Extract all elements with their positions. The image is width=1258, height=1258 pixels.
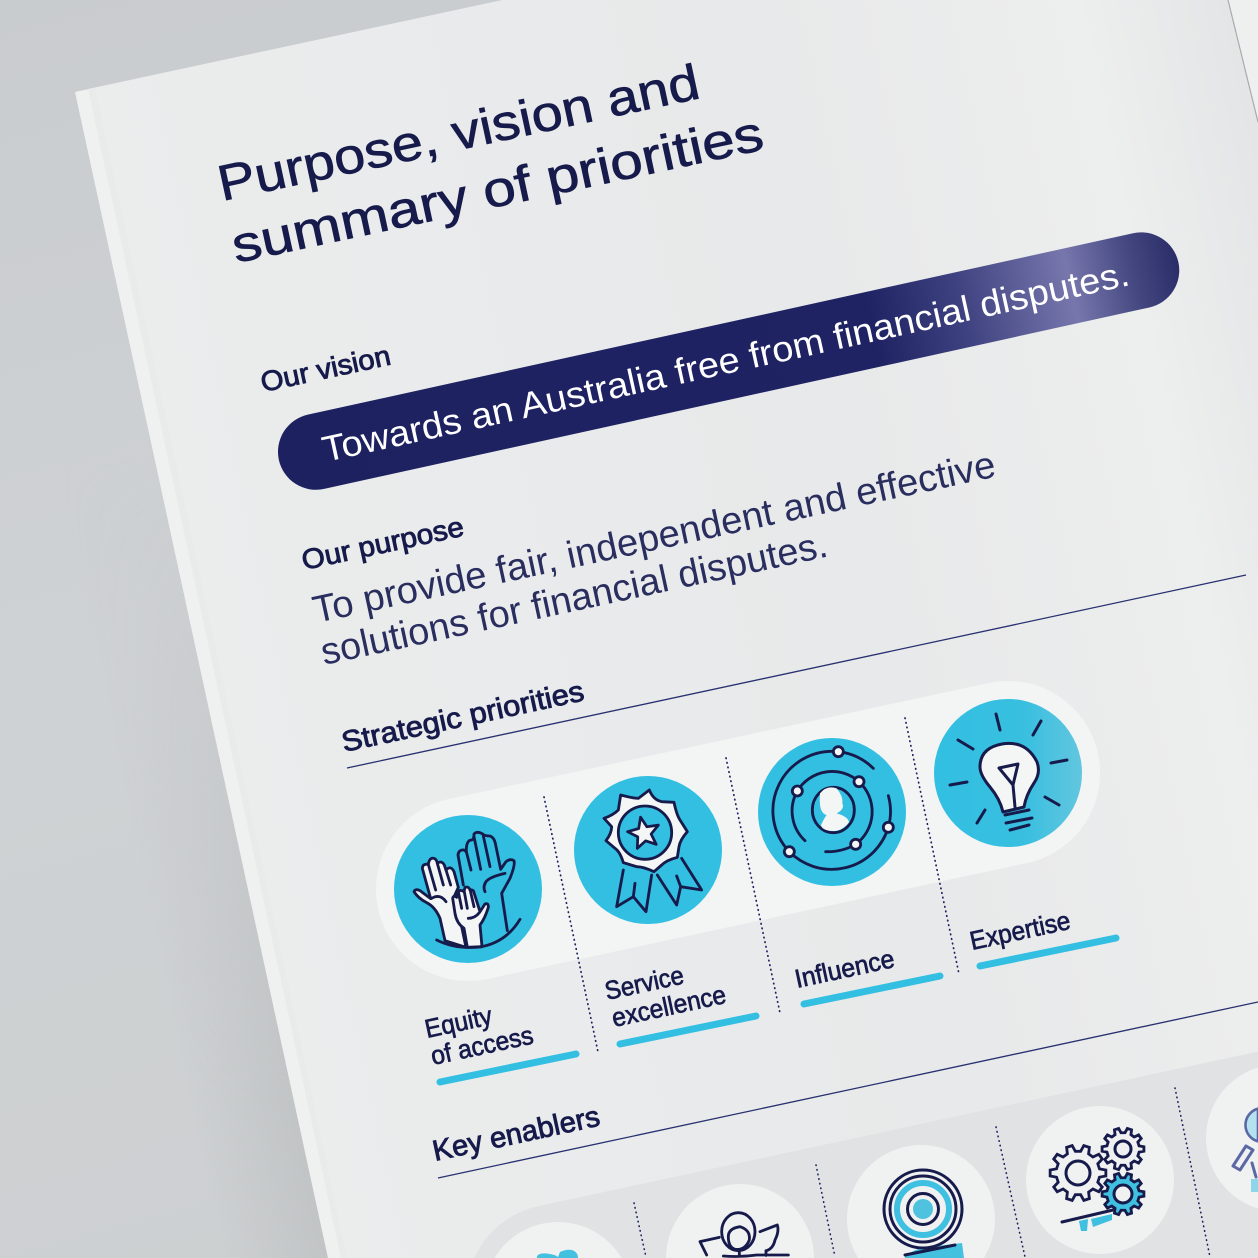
- column dividers: [544, 718, 959, 1052]
- strategic priorities heading: Strategic priorities: [339, 676, 587, 759]
- title: Purpose, vision and: [213, 54, 704, 212]
- key enablers heading: [430, 1002, 1258, 1178]
- title: summary of priorities: [227, 105, 768, 274]
- label: service excellence: [602, 960, 756, 1044]
- icon: person enabler: [1206, 1067, 1258, 1209]
- strategic priorities band: [468, 773, 1008, 889]
- icon: heart enabler: [494, 1222, 622, 1258]
- our vision label: Our vision: [258, 340, 393, 398]
- icon: team enabler: [666, 1184, 814, 1258]
- purpose statement: solutions for financial disputes.: [317, 524, 831, 674]
- label: influence: [792, 943, 940, 1004]
- vision pill: [271, 225, 1187, 497]
- label: equity of access: Equity: [422, 1000, 495, 1044]
- label: expertise: Expertise: [967, 905, 1073, 956]
- icon: equity of access hands: [394, 815, 542, 963]
- enabler dividers: [634, 1088, 1210, 1257]
- key enablers heading: Key enablers: [430, 1101, 603, 1168]
- icon: target enabler: [847, 1145, 995, 1258]
- purpose statement: To provide fair, independent and effective: [309, 444, 999, 632]
- icon: gears enabler: [1026, 1106, 1174, 1254]
- our purpose label: Our purpose: [299, 511, 467, 576]
- icon: expertise light bulb: [934, 699, 1082, 847]
- strategic priorities heading: [339, 575, 1246, 768]
- icon: service excellence medal: [574, 776, 722, 924]
- label: expertise: [967, 905, 1116, 966]
- label: equity of access: of access: [428, 1020, 536, 1071]
- label: equity of access: [422, 1000, 576, 1082]
- label: influence: Influence: [792, 943, 897, 994]
- label: service excellence: excellence: [609, 979, 729, 1033]
- vision pill: Towards an Australia free from financial disputes.: [318, 253, 1133, 470]
- title: [213, 54, 768, 274]
- label: service excellence: Service: [602, 960, 686, 1006]
- icon: influence orbit: [758, 738, 906, 886]
- key enablers band: [474, 1052, 1258, 1258]
